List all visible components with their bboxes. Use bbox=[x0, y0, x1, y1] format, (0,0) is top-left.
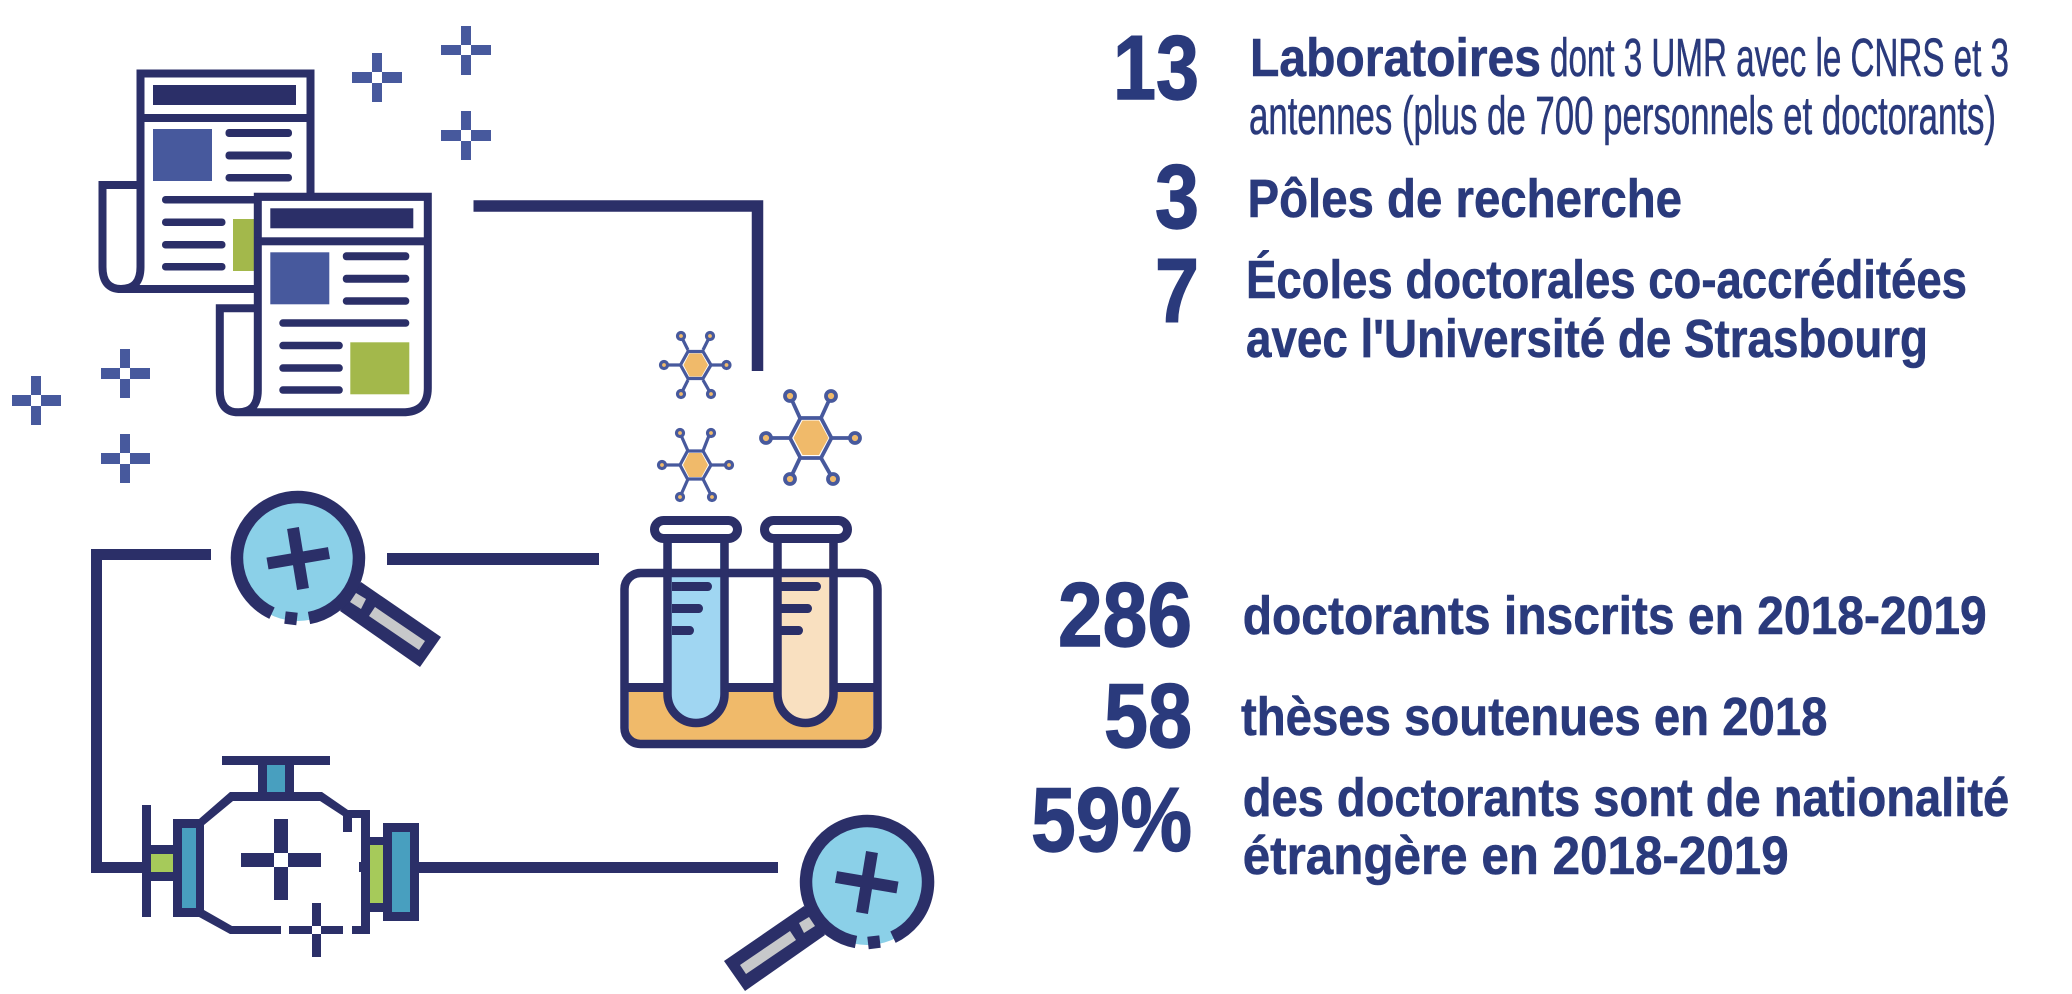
sparkle: top 3 bbox=[441, 111, 491, 160]
arrow: connector newspapers to test tubes bbox=[474, 206, 758, 371]
stat: 7 ecoles: 7 bbox=[1155, 241, 1199, 342]
stat: 59 percent bbox=[1031, 768, 2009, 886]
valve small plus bbox=[289, 903, 343, 957]
valve small plus center bbox=[312, 926, 321, 934]
icon: molecule large bbox=[761, 391, 860, 484]
stat: 3 poles: 3 bbox=[1155, 147, 1199, 248]
sparkle: left 2 bbox=[101, 349, 150, 398]
sparkle: left 1 bbox=[12, 376, 61, 425]
icon: magnifier upper bbox=[235, 495, 441, 667]
stat: 3 poles: Pôles de recherche bbox=[1248, 169, 1682, 229]
icon: molecule small bottom bbox=[658, 430, 732, 500]
valve large plus bbox=[241, 819, 321, 900]
arrow: connector test tubes to magnifier bbox=[387, 553, 599, 565]
icon: molecule small top bbox=[660, 332, 730, 398]
icon: newspaper front bbox=[220, 193, 431, 412]
stat: 7 ecoles bbox=[1155, 241, 1967, 369]
icon: valve bbox=[142, 756, 419, 957]
stat: 58 theses: thèses soutenues en 2018 bbox=[1241, 687, 1828, 747]
stat: 286 doctorants: doctorants inscrits en 2018-2019 bbox=[1243, 586, 1987, 646]
icon: test tubes in rack bbox=[624, 520, 878, 744]
sparkle: top 2 bbox=[352, 53, 402, 102]
stat: 286 doctorants bbox=[1058, 565, 1987, 666]
stat: 58 theses: 58 bbox=[1104, 666, 1192, 767]
stat: 7 ecoles: avec l'Université de Strasbourg bbox=[1246, 309, 1928, 369]
stat: 59 percent: 59% bbox=[1031, 770, 1192, 871]
icon: newspaper back bbox=[102, 70, 314, 289]
arrow: connector valve to magnifier bbox=[419, 862, 778, 873]
stat: 13 laboratoires: Laboratoires bbox=[1250, 28, 1541, 88]
stat: 286 doctorants: 286 bbox=[1058, 565, 1192, 666]
icon: magnifier lower bbox=[724, 819, 930, 991]
stat: 3 poles bbox=[1155, 147, 1682, 248]
sparkle: top 1 bbox=[441, 26, 491, 75]
sparkle: left 3 bbox=[101, 434, 150, 483]
stat: 13 laboratoires: 13 bbox=[1113, 18, 1199, 119]
stat: 58 theses bbox=[1104, 666, 1828, 767]
stat: 59 percent: étrangère en 2018-2019 bbox=[1243, 826, 1789, 886]
stat: 13 laboratoires bbox=[1113, 18, 2009, 146]
arrow: connector magnifier to valve bbox=[96, 554, 211, 868]
